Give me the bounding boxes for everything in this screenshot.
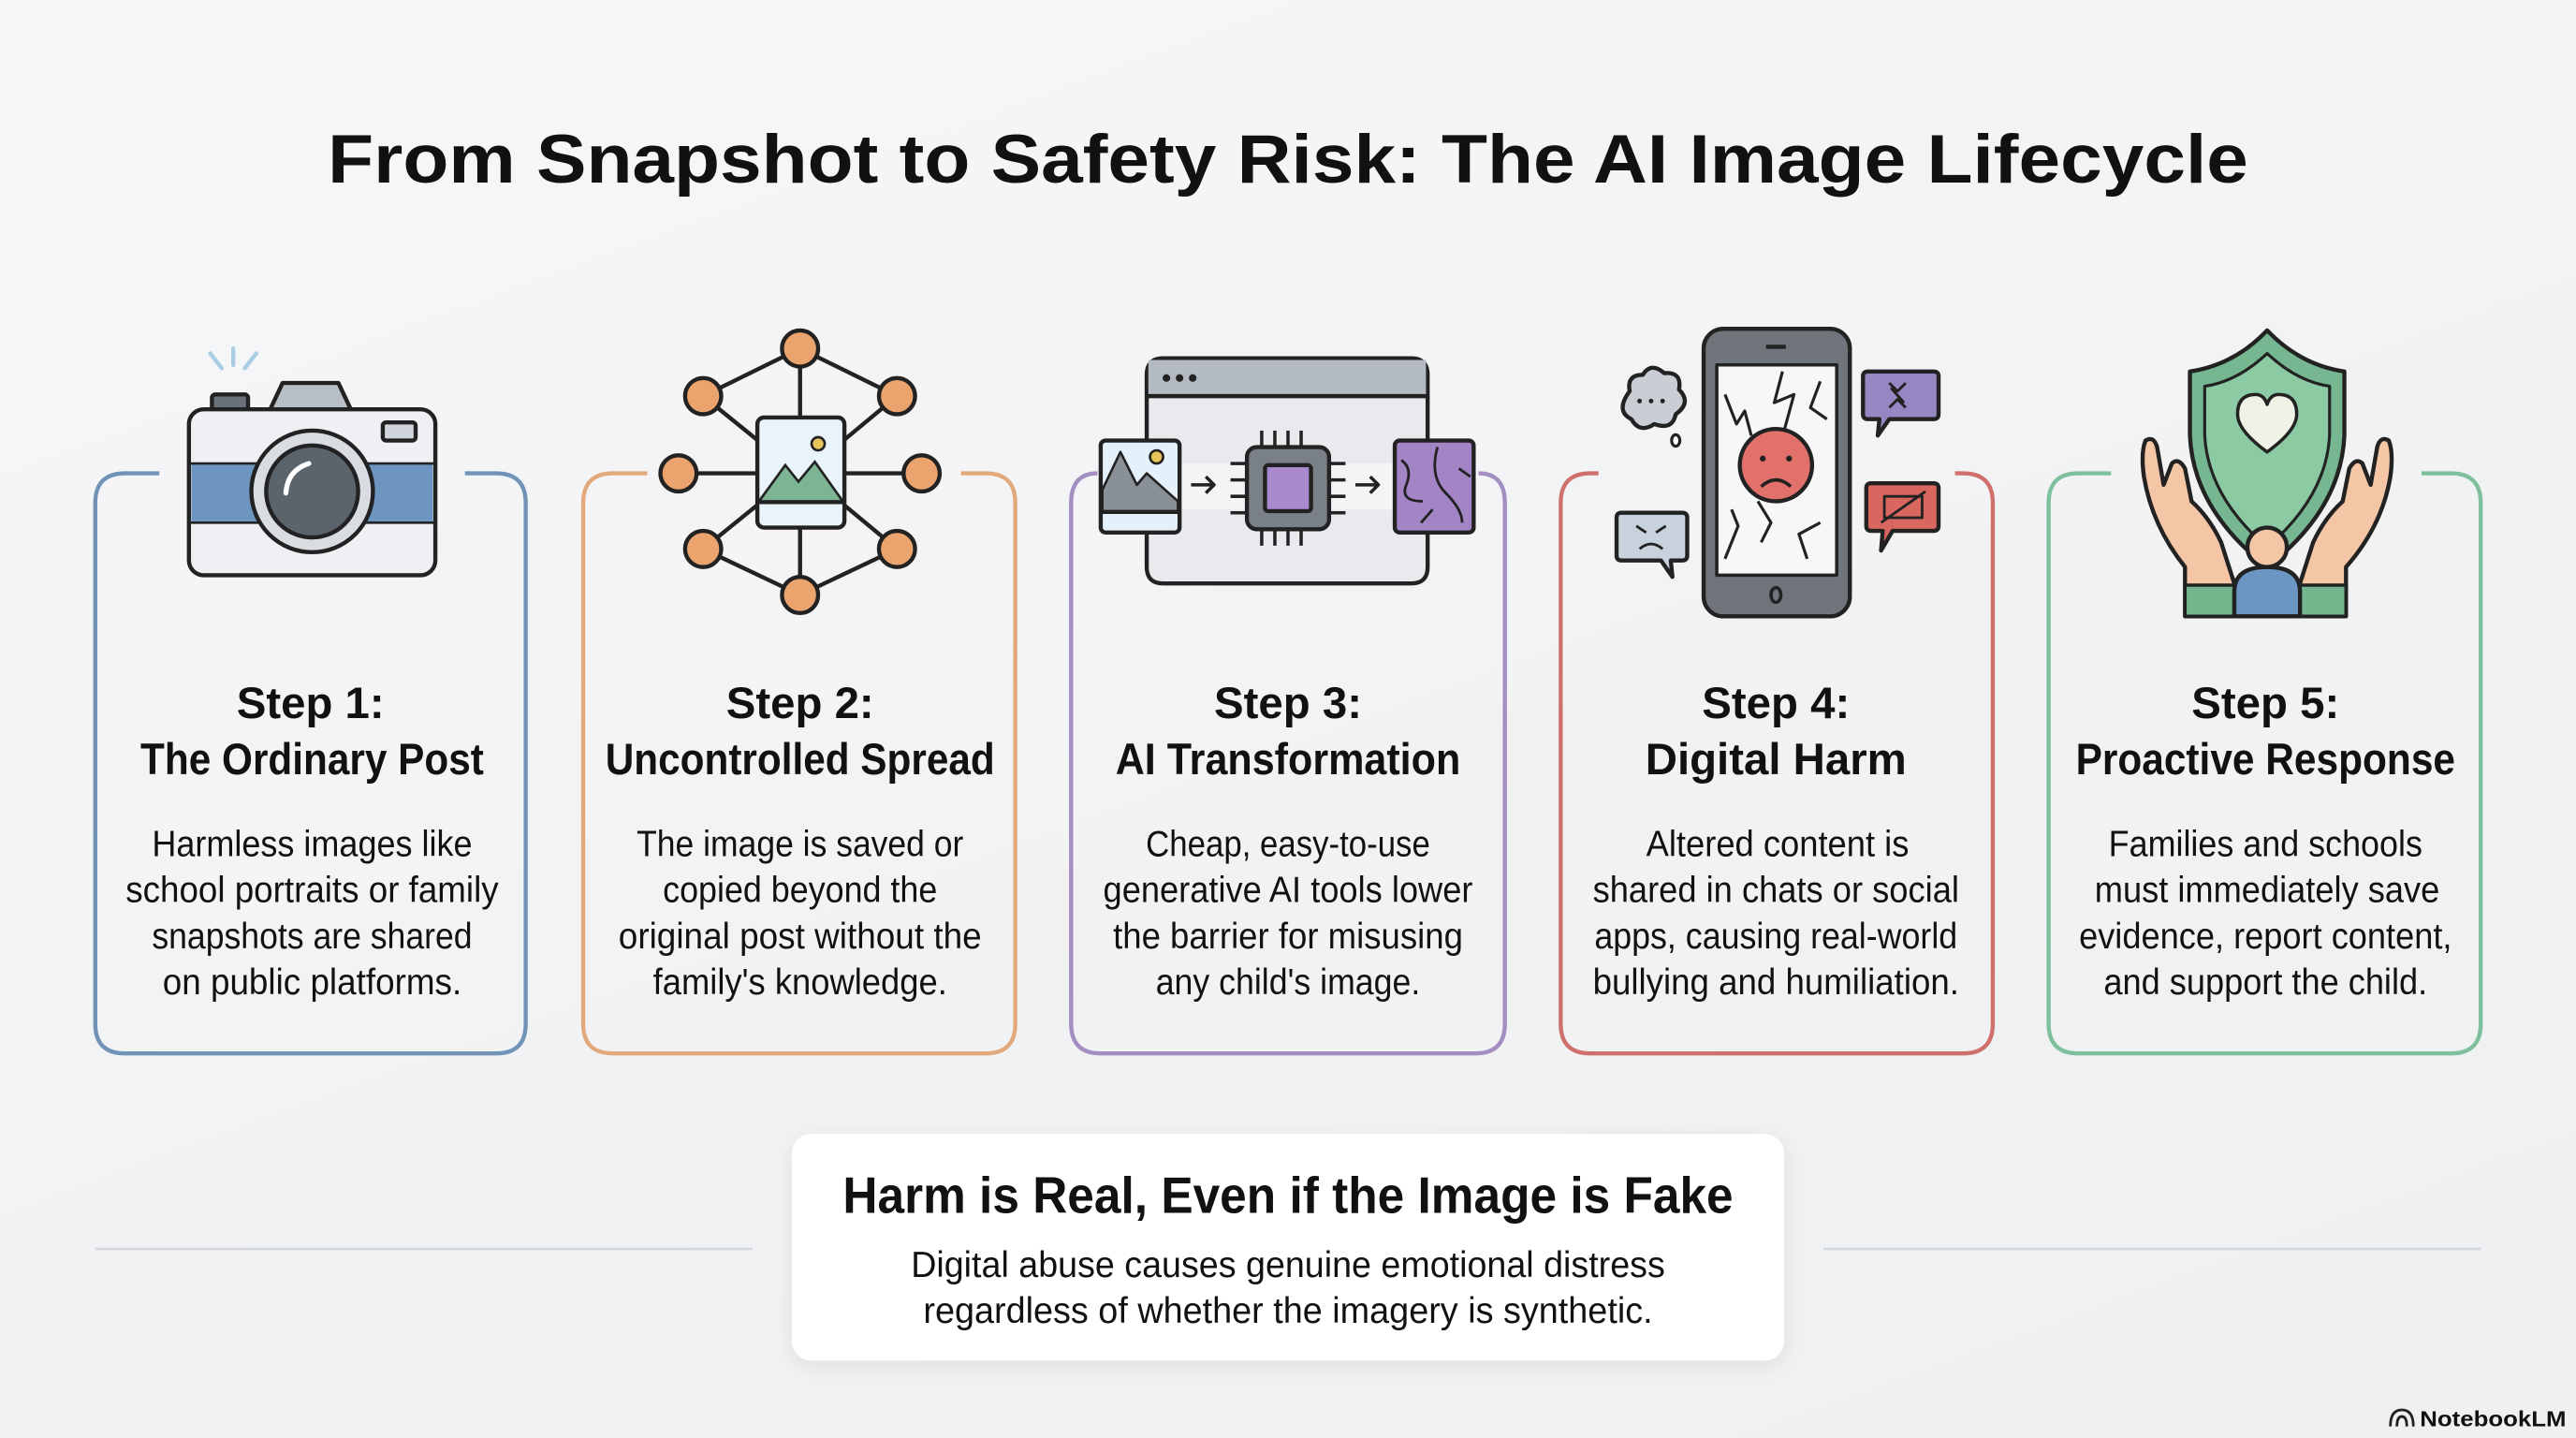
text: step 1 body: Harmless images like <box>152 825 473 865</box>
heading: step 1 <box>140 679 484 785</box>
text: step 1 body: on public platforms. <box>163 962 461 1003</box>
text: step 2 body: original post without the <box>619 917 982 957</box>
heading: step 4: Digital Harm <box>1646 735 1907 785</box>
heading: step 2: Step 2: <box>726 679 874 728</box>
text: step 1 body <box>125 825 499 1003</box>
icon: AI transformation <box>1101 359 1473 583</box>
icon: camera <box>189 348 435 575</box>
heading: step 5 <box>2076 679 2455 785</box>
text: step 3 body <box>1104 825 1473 1003</box>
callout: harm is real <box>792 1134 1784 1360</box>
text: step 5 body <box>2079 825 2452 1003</box>
callout: harm is real: Digital abuse causes genuine emotional distress <box>911 1245 1665 1285</box>
callout: harm is real: regardless of whether the imagery is synthetic. <box>923 1291 1653 1331</box>
heading: step 1: The Ordinary Post <box>140 735 484 785</box>
heading: step 5: Step 5: <box>2191 679 2339 728</box>
heading: step 4: Step 4: <box>1702 679 1850 728</box>
text: step 4 body: Altered content is <box>1647 825 1909 865</box>
icon: network spread <box>661 330 940 613</box>
icon: shield and hands <box>2143 330 2392 616</box>
text: step 1 body: school portraits or family <box>125 871 499 911</box>
text: step 2 body: The image is saved or <box>637 825 963 865</box>
logo: NotebookLM: NotebookLM <box>2420 1407 2566 1431</box>
text: step 2 body <box>619 825 982 1003</box>
heading: step 4 <box>1646 679 1907 785</box>
text: step 5 body: Families and schools <box>2109 825 2422 865</box>
text: step 3 body: the barrier for misusing <box>1113 917 1463 957</box>
heading: step 5: Proactive Response <box>2076 735 2455 785</box>
heading: step 2: Uncontrolled Spread <box>606 735 995 785</box>
callout: harm is real: Harm is Real, Even if the Image is Fake <box>842 1167 1734 1224</box>
text: step 5 body: and support the child. <box>2103 962 2427 1003</box>
heading: step 3: Step 3: <box>1214 679 1362 728</box>
text: step 4 body: shared in chats or social <box>1593 871 1959 911</box>
text: step 2 body: family's knowledge. <box>653 962 947 1003</box>
text: step 5 body: evidence, report content, <box>2079 917 2452 957</box>
icon: phone with harassment <box>1617 329 1939 616</box>
text: step 4 body: bullying and humiliation. <box>1593 962 1959 1003</box>
text: step 3 body: Cheap, easy-to-use <box>1146 825 1430 865</box>
text: step 1 body: snapshots are shared <box>152 917 473 957</box>
text: step 5 body: must immediately save <box>2095 871 2439 911</box>
panel: step 5 proactive response <box>2049 330 2481 1053</box>
panel: step 4 digital harm <box>1560 329 1993 1053</box>
text: step 2 body: copied beyond the <box>663 871 937 911</box>
panel: step 3 AI transformation <box>1071 359 1505 1053</box>
heading: step 1: Step 1: <box>237 679 385 728</box>
text: step 3 body: any child's image. <box>1156 962 1420 1003</box>
text: step 3 body: generative AI tools lower <box>1104 871 1473 911</box>
text: step 4 body: apps, causing real-world <box>1594 917 1957 957</box>
heading: step 3: AI Transformation <box>1116 735 1460 785</box>
panel: step 2 uncontrolled spread <box>583 330 1016 1053</box>
title: From Snapshot to Safety Risk: The AI Image Lifecycle <box>328 120 2248 198</box>
text: step 4 body <box>1593 825 1959 1003</box>
heading: step 2 <box>606 679 995 785</box>
heading: step 3 <box>1116 679 1460 785</box>
panel: step 1 ordinary post <box>95 348 526 1053</box>
